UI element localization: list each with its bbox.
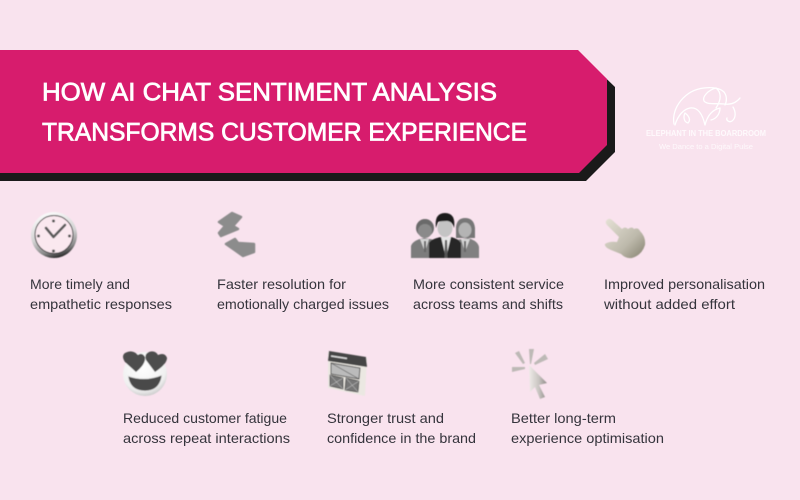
item 5: customer fatigue [123, 351, 290, 446]
text: Faster resolution for [217, 277, 346, 292]
text: Stronger trust and [327, 411, 444, 426]
text: experience optimisation [511, 431, 664, 446]
title banner [0, 50, 615, 181]
text: Improved personalisation [604, 277, 765, 292]
icon: heart-eyes emoji [123, 351, 167, 396]
item 7: long-term optimisation [511, 349, 664, 446]
text [327, 411, 476, 446]
text: confidence in the brand [327, 431, 476, 446]
icon: browser wireframe [328, 351, 367, 396]
title [42, 79, 527, 147]
text [30, 277, 172, 312]
item 1: timely responses [30, 212, 172, 312]
text [511, 411, 664, 446]
text: Reduced customer fatigue [123, 411, 287, 426]
text [603, 277, 765, 312]
text: across teams and shifts [413, 297, 563, 312]
item 4: personalisation [603, 219, 765, 312]
text [217, 277, 389, 312]
logo: Elephant in the Boardroom: We Dance to a Digital Pulse [659, 142, 753, 151]
text [123, 411, 290, 446]
text: More timely and [30, 277, 130, 292]
text: without added effort [603, 297, 735, 312]
icon: cursor click [512, 349, 548, 399]
text: emotionally charged issues [217, 297, 389, 312]
text: across repeat interactions [123, 431, 290, 446]
title: TRANSFORMS CUSTOMER EXPERIENCE [42, 119, 527, 147]
icon: team of three people [411, 213, 479, 258]
text: empathetic responses [30, 297, 172, 312]
text [413, 277, 564, 312]
title: HOW AI CHAT SENTIMENT ANALYSIS [42, 79, 497, 107]
logo: Elephant in the Boardroom: ELEPHANT IN THE BOARDROOM [646, 129, 766, 138]
icon: clock [31, 212, 77, 258]
icon: lightning bolts [219, 213, 254, 256]
text: Better long-term [511, 411, 616, 426]
text: More consistent service [413, 277, 564, 292]
item 2: faster resolution [217, 213, 389, 312]
icon: pointing hand [605, 219, 645, 258]
logo: Elephant in the Boardroom [646, 88, 766, 151]
item 6: trust and confidence [327, 351, 476, 446]
item 3: consistent service [411, 213, 564, 312]
